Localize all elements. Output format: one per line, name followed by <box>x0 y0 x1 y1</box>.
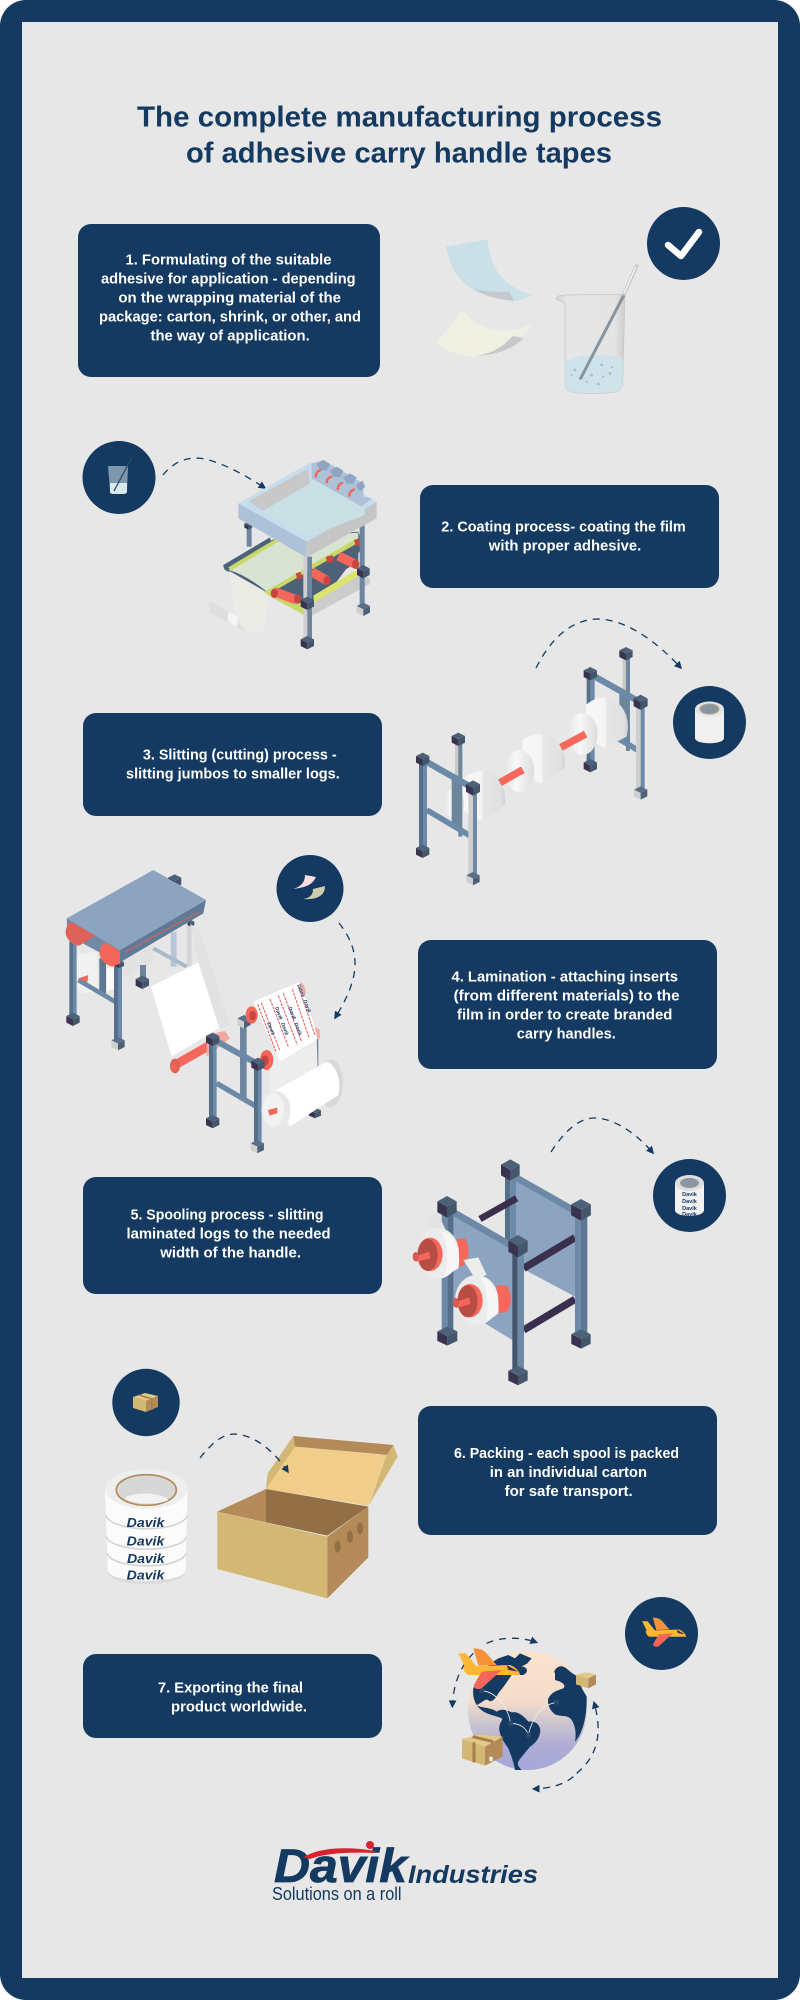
parcel small <box>576 1672 596 1688</box>
route nodes <box>479 1688 559 1737</box>
plane <box>458 1648 520 1689</box>
tray <box>238 463 377 557</box>
arrow: step 1 to 2 <box>163 458 265 488</box>
routes <box>482 1691 557 1735</box>
logo: Industries <box>408 1861 538 1889</box>
panel: step 6 text <box>418 1406 717 1535</box>
icon: spool circle: Davik <box>682 1212 698 1218</box>
panel: step 1 text: on the wrapping material of the <box>118 289 341 306</box>
arrow: step 3 to 4 <box>335 923 355 1018</box>
continents <box>473 1653 587 1770</box>
illustration: spools of tape: Davik <box>127 1567 165 1582</box>
panel: step 2 text: with proper adhesive. <box>488 537 641 554</box>
illustration: spools of tape: Davik <box>127 1551 165 1566</box>
left frame <box>416 733 480 885</box>
panel: step 1 text: 1. Formulating of the suitable <box>126 251 332 268</box>
title <box>137 102 662 170</box>
legs <box>301 525 370 649</box>
printed film: Davik <box>286 1006 297 1021</box>
printed film: Davik <box>295 984 306 998</box>
second machine back <box>237 1015 321 1118</box>
panel: step 1 text: package: carton, shrink, or other, and <box>99 308 361 325</box>
printed film: Davik <box>265 1022 276 1036</box>
printed film: Davik <box>301 999 312 1014</box>
icon: plane circle <box>625 1597 698 1670</box>
panel: step 3 text: 3. Slitting (cutting) process - <box>143 746 337 763</box>
panel: step 4 text: (from different materials) to the <box>454 987 680 1004</box>
panel: step 5 text: laminated logs to the needed <box>126 1225 331 1242</box>
film roll <box>261 1059 343 1129</box>
icon: check circle <box>647 207 720 280</box>
illustration: open carton <box>217 1436 398 1598</box>
panel: step 7 text: product worldwide. <box>171 1699 307 1716</box>
icon: roll circle <box>673 686 746 759</box>
arrow: into carton <box>200 1434 288 1472</box>
panel: step 1 text <box>78 224 380 377</box>
second machine front <box>206 1033 265 1153</box>
icon: papers circle <box>276 855 344 922</box>
printed film: Davik <box>279 1022 290 1037</box>
panel: step 6 text: in an individual carton <box>490 1464 647 1481</box>
illustration: spooling machine <box>413 1159 591 1385</box>
arrow: step 4 to 5 <box>551 1118 653 1153</box>
panel: step 5 text <box>83 1177 382 1294</box>
panel: step 1 text: adhesive for application - depending <box>101 270 356 287</box>
panel: step 6 text: 6. Packing - each spool is packed <box>454 1445 679 1462</box>
illustration: slitting machine <box>416 647 648 885</box>
title: The complete manufacturing process <box>137 102 662 134</box>
illustration: coating machine <box>208 460 377 649</box>
illustration: spools of tape: Davik <box>127 1533 165 1548</box>
icon: spool circle <box>653 1159 726 1232</box>
illustration: globe with shipping routes <box>452 1638 598 1789</box>
first machine <box>66 870 206 1050</box>
icon: spool circle: Davik <box>682 1192 698 1198</box>
icon: spool circle: Davik <box>682 1206 698 1212</box>
panel: step 7 text <box>83 1654 382 1738</box>
logo: Solutions on a roll <box>272 1884 402 1904</box>
panel: step 1 text: the way of application. <box>150 327 310 344</box>
icon: beaker circle <box>82 441 156 514</box>
film hanging <box>208 567 270 632</box>
illustration: spools of tape <box>105 1469 188 1584</box>
panel: step 3 text: slitting jumbos to smaller logs. <box>126 765 340 782</box>
arrow: step 2 to 3 <box>536 619 681 668</box>
front panel <box>437 1196 528 1385</box>
back panel and bars <box>480 1159 591 1349</box>
panel: step 4 text <box>418 940 717 1069</box>
panel: step 7 text: 7. Exporting the final <box>158 1680 303 1697</box>
icon: box circle <box>112 1369 180 1436</box>
adhesive valves <box>312 460 372 507</box>
panel: step 6 text: for safe transport. <box>505 1483 633 1500</box>
panel: step 2 text <box>420 485 719 588</box>
printed film: Davik <box>292 1022 303 1037</box>
illustration: spools of tape: Davik <box>127 1515 165 1530</box>
white film <box>151 923 230 1073</box>
panel: step 3 text <box>83 713 382 816</box>
shafts and logs <box>445 698 628 821</box>
printed film <box>246 982 320 1070</box>
title: of adhesive carry handle tapes <box>186 138 612 170</box>
conveyor <box>223 522 370 617</box>
panel: step 4 text: film in order to create branded <box>457 1006 672 1023</box>
logo: Davik <box>274 1839 410 1892</box>
logo <box>272 1839 538 1904</box>
dashed orbit arrows <box>452 1638 598 1789</box>
parcel large <box>462 1734 503 1766</box>
icon: spool circle: Davik <box>682 1199 698 1205</box>
panel: step 5 text: 5. Spooling process - slitting <box>131 1206 324 1223</box>
panel: step 4 text: carry handles. <box>517 1025 616 1042</box>
spool two <box>453 1257 511 1325</box>
illustration: films and beaker <box>436 239 637 393</box>
panel: step 5 text: width of the handle. <box>159 1244 301 1261</box>
panel: step 2 text: 2. Coating process- coating the film <box>441 518 686 535</box>
right frame <box>584 647 648 800</box>
printed film: Davik <box>273 1006 284 1021</box>
spool one <box>413 1213 469 1279</box>
panel: step 4 text: 4. Lamination - attaching inserts <box>452 968 678 985</box>
illustration: lamination machine <box>66 870 343 1153</box>
